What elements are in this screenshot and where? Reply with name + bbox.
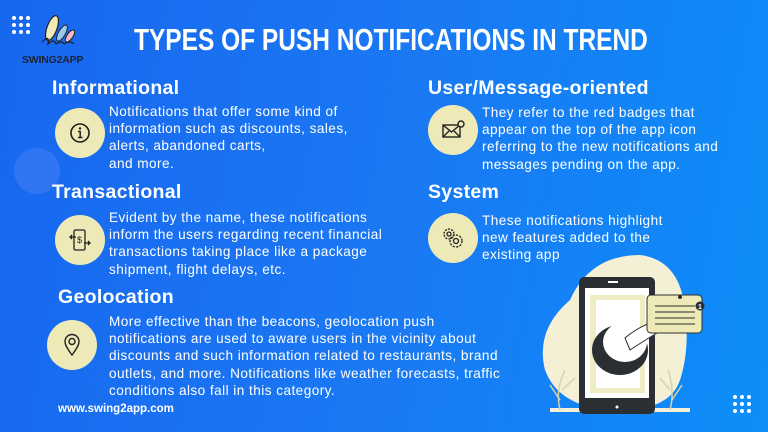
logo dots <box>12 16 30 34</box>
logo mark <box>42 15 76 46</box>
website footer: www.swing2app.com <box>58 403 174 415</box>
text: transactions taking place like a package <box>109 244 367 259</box>
text <box>109 210 382 277</box>
heading: Transactional <box>52 181 182 203</box>
panel: geolocation <box>47 286 500 398</box>
heading: System <box>428 181 499 203</box>
text: and more. <box>109 156 174 171</box>
decorative faint circle <box>14 148 60 194</box>
text: inform the users regarding recent financial <box>109 227 382 242</box>
text <box>482 105 718 172</box>
text <box>109 314 500 398</box>
text <box>109 104 348 171</box>
panel: transactional <box>52 181 382 277</box>
panel: user/message-oriented <box>428 77 718 172</box>
text: They refer to the red badges that <box>482 105 695 120</box>
text: alerts, abandoned carts, <box>109 138 266 153</box>
illustration: phone with notification: 1 <box>698 304 702 311</box>
text <box>482 213 663 262</box>
text: discounts and such information related to restaurants, brand <box>109 348 498 363</box>
illustration: phone with notification <box>542 255 704 414</box>
icon: phone money <box>55 215 105 265</box>
text: More effective than the beacons, geolocation push <box>109 314 435 329</box>
text: conditions also fall in this category. <box>109 383 335 398</box>
dots bottom right <box>733 395 751 413</box>
text: notifications are used to aware users in the vicinity about <box>109 331 476 346</box>
heading: User/Message-oriented <box>428 77 649 99</box>
title: TYPES OF PUSH NOTIFICATIONS IN TREND <box>134 22 648 57</box>
icon: location pin <box>47 320 97 370</box>
heading: Informational <box>52 77 179 99</box>
panel: informational <box>52 77 348 171</box>
text: existing app <box>482 247 560 262</box>
text: new features added to the <box>482 230 650 245</box>
text: outlets, and more. Notifications like weather forecasts, traffic <box>109 366 500 381</box>
logo <box>12 15 83 66</box>
text: referring to the new notifications and <box>482 139 718 154</box>
text: shipment, flight delays, etc. <box>109 262 286 277</box>
text: These notifications highlight <box>482 213 663 228</box>
text: Evident by the name, these notifications <box>109 210 367 225</box>
logo text: SWING2APP <box>22 54 83 66</box>
icon: phone money: $ <box>77 235 82 245</box>
text: messages pending on the app. <box>482 157 681 172</box>
heading: Geolocation <box>58 286 174 308</box>
icon: gears <box>428 213 478 263</box>
icon: info <box>55 108 105 158</box>
icon: envelope <box>428 105 478 155</box>
text: Notifications that offer some kind of <box>109 104 338 119</box>
text: appear on the top of the app icon <box>482 122 696 137</box>
text: information such as discounts, sales, <box>109 121 348 136</box>
panel: system <box>428 181 663 263</box>
